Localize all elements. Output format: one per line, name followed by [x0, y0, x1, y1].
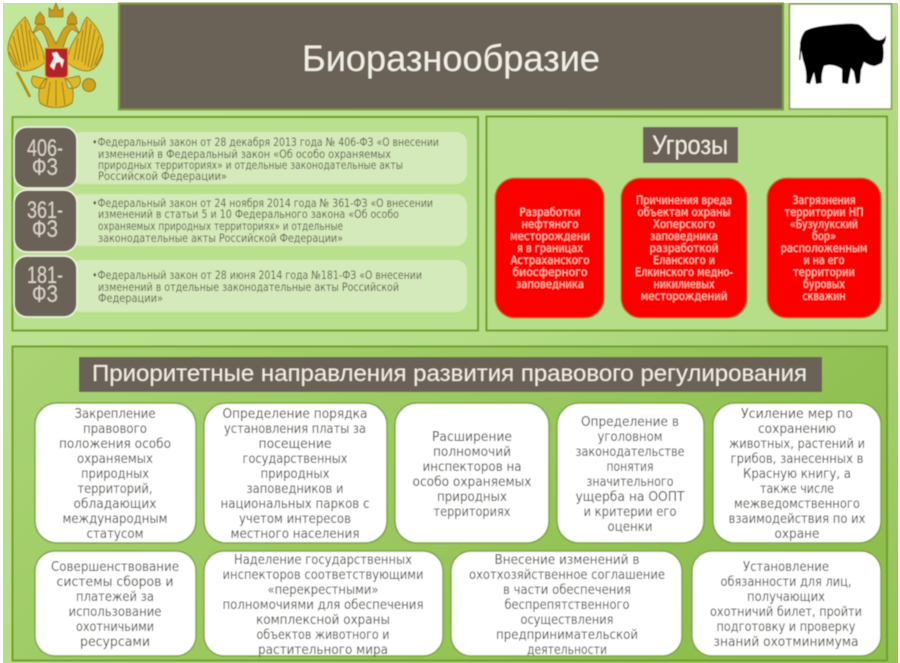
threat card: Buzuluk forest: скважин: [802, 289, 846, 303]
card: red book: также числе: [760, 481, 834, 497]
panel: threats: [486, 116, 887, 330]
law row 361-ФЗ: •Федеральный закон от 24 ноября 2014 года № 361-ФЗ «О внесении: [92, 196, 433, 210]
panel: federal laws: [12, 117, 478, 330]
threat card: Buzuluk forest: буровых: [803, 277, 845, 291]
threat card: Buzuluk forest: и на его: [804, 253, 844, 267]
threat card: Khopyor reserve: разработкой: [650, 241, 718, 255]
card: criminal damage: законодательстве: [576, 444, 684, 460]
card: hunter training: обязанности для лиц,: [720, 574, 852, 590]
card: hunting agreement: [451, 551, 682, 658]
panel: priority directions: [12, 346, 887, 660]
card: inspector powers: особо охраняемых: [412, 474, 532, 490]
card: visit fees: заповедников и: [246, 481, 344, 497]
card: red book: Усиление мер по: [741, 406, 853, 422]
card: legal status: территорий,: [78, 481, 152, 497]
card: hunting fees: системы сборов и: [56, 574, 174, 590]
scepter: [17, 72, 30, 97]
card: criminal damage: значительного: [586, 474, 674, 490]
card: red book: животных, растений и: [729, 436, 865, 452]
card: visit fees: [204, 403, 387, 543]
threat card: Khopyor reserve: [621, 178, 747, 318]
orb: [82, 78, 96, 92]
law row 361-ФЗ: изменений в статьи 5 и 10 Федерального закона «Об особо: [98, 207, 399, 221]
title: Биоразнообразие: [302, 38, 600, 79]
icon: bison silhouette: [799, 24, 886, 84]
threat card: oil deposits: биосферного: [512, 265, 588, 279]
law row 181-ФЗ: Федерации»: [98, 291, 163, 305]
threat card: Khopyor reserve: заповедника: [650, 229, 718, 243]
threat card: Buzuluk forest: [767, 178, 881, 318]
threat card: oil deposits: заповедника: [516, 277, 584, 291]
card: visit fees: национальных парков с: [220, 496, 370, 512]
threat card: Khopyor reserve: Еланского и: [653, 253, 715, 267]
law row 361-ФЗ: охраняемых природных территориях» и отдельные: [98, 219, 343, 233]
panel: title bar: [119, 4, 783, 110]
tail and legs: [31, 76, 81, 108]
threat card: oil deposits: Разработки: [520, 205, 580, 219]
law row 406-ФЗ: природных территориях» и отдельные законодательные акты: [98, 158, 403, 172]
threat card: Khopyor reserve: Хоперского: [653, 217, 715, 231]
priorities heading: [79, 357, 822, 392]
threat card: oil deposits: месторождени: [510, 229, 590, 243]
threat card: Khopyor reserve: никилиевых: [654, 277, 715, 291]
law row 181-ФЗ: ФЗ: [32, 281, 58, 308]
card: hunter training: знаний охотминимума: [714, 634, 858, 650]
card: cross powers: растительного мира: [258, 642, 388, 658]
card: cross powers: «перекрестными»: [268, 582, 378, 598]
card: cross powers: полномочиями для обеспечения: [222, 597, 424, 613]
card: visit fees: государственных: [242, 451, 348, 467]
card: hunting agreement: в части обеспечения: [503, 582, 631, 598]
threat card: Buzuluk forest: территории: [793, 265, 855, 279]
law row 361-ФЗ: законодательные акты Российской Федерации»: [98, 231, 343, 245]
card: inspector powers: [395, 403, 549, 543]
law row 406-ФЗ: [14, 127, 467, 188]
card: visit fees: посещение: [258, 436, 332, 452]
card: hunter training: охотничий билет, пройти: [710, 604, 862, 620]
rider: [50, 52, 64, 70]
crowns: [35, 3, 77, 24]
threat card: Khopyor reserve: Елкинского медно-: [635, 265, 733, 279]
threat card: Khopyor reserve: месторождений: [640, 289, 728, 303]
card: legal status: охраняемых: [77, 451, 153, 467]
priorities heading: Приоритетные направления развития правового регулирования: [92, 360, 807, 386]
law row 361-ФЗ: [14, 190, 467, 252]
card: inspector powers: инспекторов на: [422, 459, 522, 475]
card: visit fees: природных: [260, 466, 330, 482]
card: criminal damage: ущерба на ООПТ: [576, 489, 685, 505]
card: legal status: [35, 403, 196, 543]
threat card: Buzuluk forest: бор»: [812, 229, 836, 243]
right wing: [67, 17, 103, 71]
card: hunter training: [692, 551, 881, 656]
law row 361-ФЗ: 361-: [27, 197, 63, 224]
law row 181-ФЗ: •Федеральный закон от 28 июня 2014 года №181-ФЗ «О внесении: [92, 268, 422, 282]
wing feathers: [9, 20, 103, 68]
card: visit fees: местного населения: [230, 526, 360, 542]
card: visit fees: Определение порядка: [222, 406, 368, 422]
threat card: Buzuluk forest: «Бузулукский: [790, 217, 858, 231]
card: hunting agreement: деятельности: [527, 642, 607, 658]
card: hunting fees: ресурсами: [80, 634, 150, 650]
card: hunting agreement: Внесение изменений в: [494, 552, 640, 568]
threat card: Buzuluk forest: Загрязнения: [792, 193, 856, 207]
threat card: oil deposits: нефтяного: [522, 217, 578, 231]
card: criminal damage: Определение в: [581, 414, 679, 430]
law row 406-ФЗ: ФЗ: [32, 154, 58, 181]
card: legal status: Закрепление: [74, 406, 156, 422]
threat card: Buzuluk forest: территории НП: [784, 205, 864, 219]
law row 361-ФЗ: ФЗ: [32, 216, 58, 243]
card: cross powers: Наделение государственных: [234, 552, 412, 568]
card: hunting agreement: предпринимательской: [496, 627, 638, 643]
card: cross powers: объектов животного и: [256, 627, 390, 643]
card: hunter training: Установление: [743, 559, 829, 575]
card: hunting agreement: осуществления: [520, 612, 614, 628]
card: legal status: правового: [83, 421, 147, 437]
law row 406-ФЗ: Российской Федерации»: [98, 169, 227, 183]
law row 181-ФЗ: 181-: [27, 262, 63, 289]
card: cross powers: инспекторов соответствующими: [222, 567, 424, 583]
card: visit fees: установления платы за: [224, 421, 366, 437]
card: hunter training: получающих: [747, 589, 825, 605]
left wing: [8, 17, 45, 71]
card: hunting agreement: охотхозяйственное соглашение: [469, 567, 665, 583]
card: legal status: положения особо: [59, 436, 171, 452]
card: red book: Красную книгу, а: [743, 466, 851, 482]
icon: Russian coat of arms: [8, 3, 103, 108]
threats heading: Угрозы: [652, 130, 728, 160]
card: red book: охране: [774, 526, 820, 542]
card: legal status: природных: [81, 466, 149, 482]
necks and heads: [33, 24, 79, 48]
threat card: Buzuluk forest: расположенным: [780, 241, 868, 255]
card: red book: взаимодействия по их: [728, 511, 866, 527]
law row 406-ФЗ: 406-: [27, 135, 63, 162]
card: criminal damage: [557, 403, 704, 543]
threat card: oil deposits: Астраханского: [510, 253, 590, 267]
card: cross powers: [204, 551, 443, 658]
law row 181-ФЗ: [14, 256, 467, 317]
card: hunting fees: платежей за: [76, 589, 154, 605]
card: criminal damage: понятия: [606, 459, 654, 475]
threat card: Khopyor reserve: Причинения вреда: [636, 193, 732, 207]
threat card: Khopyor reserve: объектам охраны: [638, 205, 730, 219]
card: criminal damage: оценки: [608, 519, 652, 535]
card: red book: межведомственного: [734, 496, 860, 512]
card: inspector powers: природных: [437, 489, 507, 505]
card: hunting fees: Совершенствование: [51, 559, 179, 575]
card: legal status: статусом: [86, 526, 144, 542]
panel: bison picture: [790, 4, 892, 109]
law row 181-ФЗ: изменений в отдельные законодательные акты Российской: [98, 280, 399, 294]
card: criminal damage: и критерии его: [584, 504, 676, 520]
card: red book: грибов, занесенных в: [730, 451, 864, 467]
threat card: oil deposits: [495, 178, 604, 318]
card: hunter training: подготовку и проверку: [716, 619, 856, 635]
card: hunting fees: использование: [68, 604, 162, 620]
card: inspector powers: Расширение: [432, 429, 512, 445]
card: legal status: обладающих: [74, 496, 157, 512]
card: red book: [713, 403, 881, 543]
card: legal status: международным: [62, 511, 168, 527]
card: red book: сохранению: [758, 421, 836, 437]
card: hunting fees: охотничьими: [76, 619, 154, 635]
law row 406-ФЗ: •Федеральный закон от 28 декабря 2013 года № 406-ФЗ «О внесении: [92, 135, 439, 149]
card: visit fees: учетом интересов: [239, 511, 351, 527]
card: hunting fees: [35, 551, 196, 656]
threat card: oil deposits: я в границах: [517, 241, 583, 255]
card: inspector powers: полномочий: [433, 444, 511, 460]
red shield: [45, 48, 68, 78]
tail feathers: [47, 80, 65, 106]
card: inspector powers: территориях: [434, 504, 510, 520]
card: cross powers: комплексной охраны: [256, 612, 390, 628]
card: criminal damage: уголовном: [598, 429, 662, 445]
law row 406-ФЗ: изменений в Федеральный закон «Об особо охраняемых: [98, 147, 391, 161]
card: hunting agreement: беспрепятственного: [504, 597, 630, 613]
